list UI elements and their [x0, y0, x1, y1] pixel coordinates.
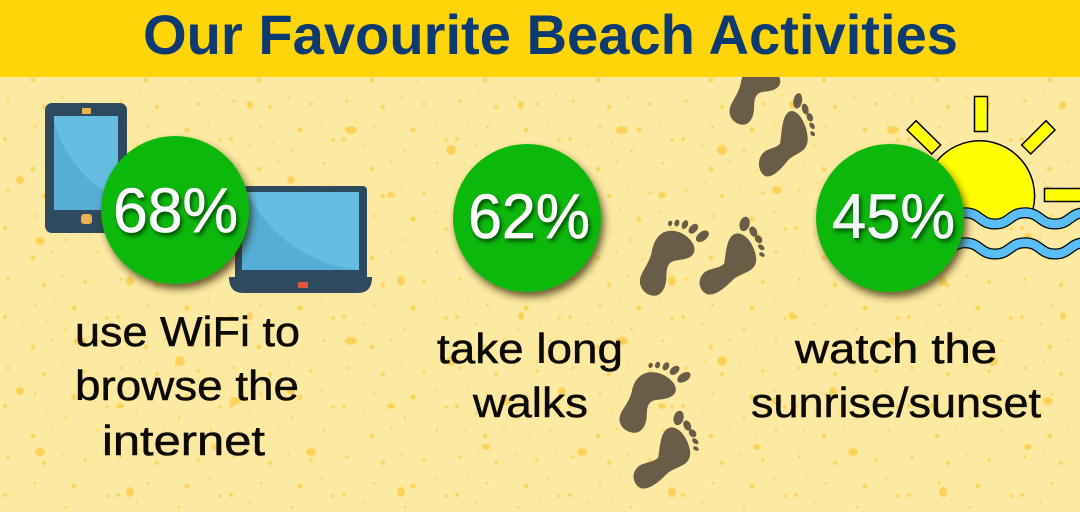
label: use WiFi to browse the internet	[75, 308, 300, 464]
stat: 68%	[101, 136, 249, 284]
stat: 62%	[453, 144, 601, 292]
footprint: middle left	[642, 220, 710, 294]
footprint: bottom right	[635, 410, 699, 487]
icon: laptop	[229, 186, 372, 293]
icon: tablet	[45, 103, 127, 233]
footprint: middle right	[701, 216, 765, 293]
icon: footprints	[621, 54, 815, 487]
label: use WiFi to browse the internet: use WiFi to	[75, 308, 300, 355]
stat: 45%: 45%	[832, 182, 955, 252]
title: Our Favourite Beach Activities	[143, 3, 958, 66]
wave: lower	[950, 243, 1080, 254]
stat: 68%: 68%	[113, 176, 238, 246]
label: watch the sunrise/sunset: sunrise/sunset	[751, 379, 1041, 426]
title banner	[0, 0, 1080, 77]
footprint: bottom left	[621, 362, 692, 431]
label: use WiFi to browse the internet: browse the	[75, 362, 299, 409]
sun ray: upper right	[1022, 121, 1055, 154]
sun ray: right	[1044, 188, 1080, 202]
sun ray: top	[974, 96, 988, 132]
label: take long walks	[437, 325, 623, 426]
footprint: top right	[761, 93, 815, 175]
label: take long walks: walks	[472, 379, 588, 426]
sun disc	[925, 141, 1035, 228]
label: use WiFi to browse the internet: internet	[102, 417, 265, 464]
stat: 45%	[816, 144, 964, 292]
label: take long walks: take long	[437, 325, 623, 372]
sun ray: upper left	[907, 121, 941, 154]
label: watch the sunrise/sunset: watch the	[794, 325, 997, 372]
footprint: top left	[731, 54, 794, 123]
label: watch the sunrise/sunset	[751, 325, 1041, 426]
icon: sun over waves	[907, 96, 1080, 254]
wave: upper	[950, 213, 1080, 224]
stat: 62%: 62%	[468, 182, 590, 252]
